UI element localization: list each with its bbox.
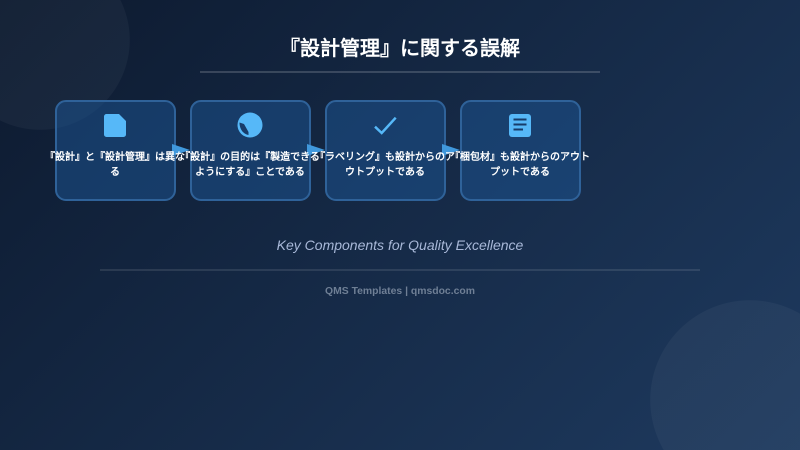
arrow 1 <box>172 144 190 156</box>
footer: QMS Templates | qmsdoc.com <box>325 286 475 297</box>
card 1 text: 『設計』と『設計管理』は異な <box>45 152 185 162</box>
icon: compass circle <box>238 112 262 138</box>
icon: document <box>104 114 126 137</box>
icon: article <box>509 114 531 137</box>
card 3: labeling <box>324 100 446 200</box>
card 4 text: プットである <box>490 166 550 178</box>
card 1 text <box>45 150 185 178</box>
card 2 text: ようにする』ことである <box>195 166 305 178</box>
title: 『設計管理』に関する誤解 <box>280 38 520 60</box>
card 4: packaging <box>460 100 580 200</box>
card 2: purpose of design <box>190 100 310 200</box>
icon: check mark <box>374 116 396 135</box>
arrow 3 <box>442 144 460 156</box>
decorative circle: bottom right <box>650 300 800 450</box>
card 1 text: る <box>110 166 120 178</box>
card 3 text: ウトプットである <box>345 166 425 178</box>
subtitle: Key Components for Quality Excellence <box>277 237 523 253</box>
card 4 text: 『梱包材』も設計からのアウト <box>450 152 590 162</box>
card 1: design vs design control <box>54 100 176 200</box>
decorative circle: top left <box>0 0 130 130</box>
card 2 text <box>180 150 320 178</box>
card 3 text <box>315 150 455 178</box>
card 2 text: 『設計』の目的は『製造できる <box>180 152 320 162</box>
card 4 text <box>450 150 590 178</box>
card 3 text: 『ラベリング』も設計からのア <box>315 152 455 162</box>
arrow 2 <box>307 144 325 156</box>
